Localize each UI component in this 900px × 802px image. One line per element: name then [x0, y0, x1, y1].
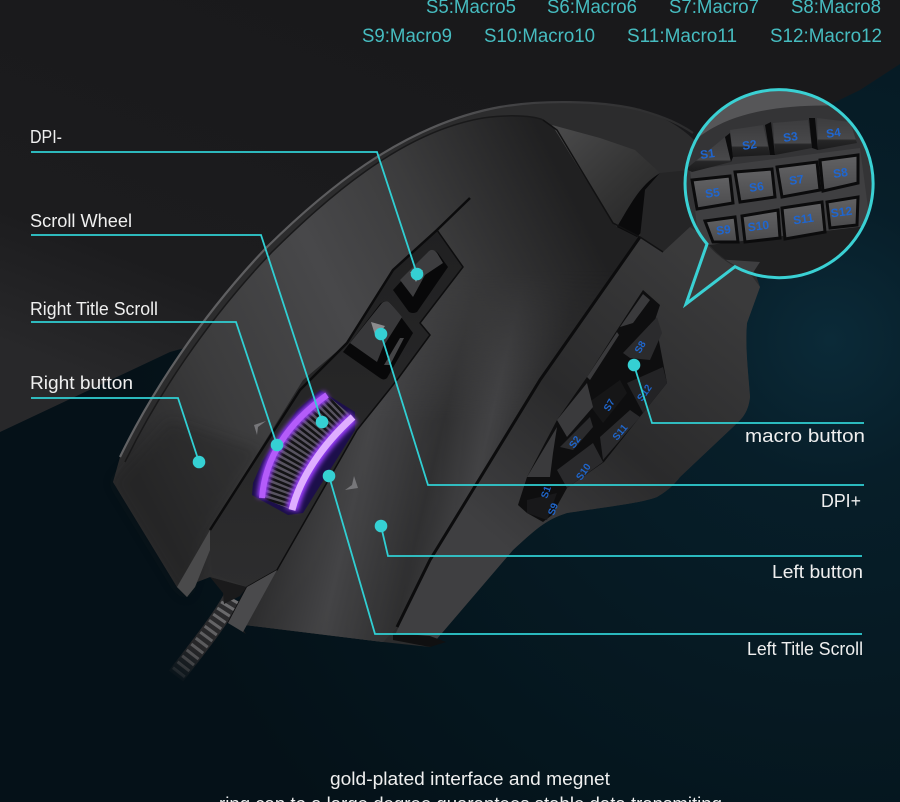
scroll wheel — [250, 385, 360, 520]
side grip panel — [395, 227, 760, 647]
black notch — [617, 173, 660, 237]
macro side keys — [518, 290, 667, 522]
callout labels: macro button — [745, 426, 865, 446]
keypad legends: S5 — [704, 185, 721, 201]
keypad legends: S11 — [792, 211, 815, 227]
callout ring and pointer outline — [685, 90, 873, 304]
side key legends: S10 — [574, 461, 594, 483]
side key legends — [539, 339, 655, 517]
keypad legends: S4 — [825, 125, 842, 141]
keypad legends: S3 — [782, 129, 799, 145]
keypad legends: S6 — [748, 179, 765, 195]
mouse illustration — [113, 102, 760, 676]
grey fins — [527, 294, 650, 477]
side key legends: S7 — [602, 397, 618, 414]
arrow mark left — [254, 421, 266, 435]
callout labels — [30, 127, 865, 659]
side rail right button — [177, 530, 210, 597]
mouse body silhouette — [113, 102, 760, 647]
callout lines — [31, 152, 864, 634]
keypad legends: S10 — [747, 218, 770, 234]
keypad legends: S8 — [832, 165, 849, 181]
side key legends: S1 — [539, 484, 554, 500]
left button corner facet — [228, 570, 277, 632]
callout labels: Right button — [30, 373, 133, 393]
callout labels: DPI+ — [821, 491, 861, 511]
braided cable — [176, 598, 232, 676]
rim inner line — [125, 116, 543, 462]
bottom caption: gold-plated interface and megnet — [330, 769, 610, 789]
zoom callout: macro keypad — [685, 85, 875, 305]
side key legends: S8 — [633, 339, 649, 356]
top shell wing — [552, 125, 660, 227]
macro key list text — [362, 0, 882, 47]
callout dots — [193, 268, 640, 532]
keypad legends: S9 — [715, 222, 732, 238]
side key legends: S9 — [546, 501, 561, 517]
channel edge — [228, 230, 463, 623]
button: DPI plus — [343, 301, 413, 380]
main top shell panel — [113, 116, 640, 642]
macro key list text: S11:Macro11 — [627, 26, 737, 47]
left button panel — [291, 346, 469, 642]
key: S1 S9 — [527, 493, 557, 520]
callout pointer — [685, 244, 735, 305]
callout labels: Scroll Wheel — [30, 211, 132, 231]
keypad legends: S2 — [741, 137, 758, 153]
key: S12 — [627, 367, 667, 413]
background: grey diagonal upper area — [0, 0, 900, 432]
shell section behind bubble — [640, 170, 710, 252]
button: DPI minus — [393, 250, 448, 313]
side key legends: S12 — [635, 382, 655, 404]
seam edge — [543, 120, 663, 252]
centre channel — [210, 198, 470, 587]
key: S11 — [600, 410, 640, 460]
keypad legends: S7 — [788, 172, 805, 188]
callout labels: Left Title Scroll — [747, 639, 863, 659]
keypad legends — [699, 125, 853, 238]
key: S7 — [588, 380, 627, 423]
keypad row 2 — [692, 155, 858, 209]
wheel purple glow — [262, 395, 327, 498]
outer rim highlight — [120, 102, 693, 457]
callout disc — [685, 90, 873, 278]
macro key list text: S10:Macro10 — [484, 26, 595, 47]
main black seam — [397, 237, 640, 627]
arrow mark right — [345, 476, 358, 490]
key: S2 — [560, 417, 593, 450]
keypad legends: S1 — [699, 146, 716, 162]
key: S8 — [623, 317, 662, 360]
side key legends: S2 — [567, 434, 584, 451]
lower left panel shadow — [113, 420, 260, 597]
macro key list text: S9:Macro9 — [362, 26, 452, 47]
keypad row 1 — [686, 118, 857, 172]
lower foot — [393, 633, 446, 647]
wheel body ribs — [262, 395, 350, 508]
keypad row 3 — [705, 197, 858, 242]
side key legends: S11 — [611, 422, 631, 443]
callout labels: DPI- — [30, 127, 62, 147]
keypad legends: S12 — [830, 204, 853, 220]
wheel blue housing — [252, 390, 355, 515]
cable connector — [210, 566, 247, 604]
key: S10 — [557, 443, 603, 488]
macro key list text: S12:Macro12 — [770, 26, 882, 47]
channel top line — [210, 198, 470, 530]
callout labels: Left button — [772, 562, 863, 582]
bottom caption — [219, 769, 722, 802]
callout labels: Right Title Scroll — [30, 299, 158, 319]
key well — [518, 290, 667, 522]
